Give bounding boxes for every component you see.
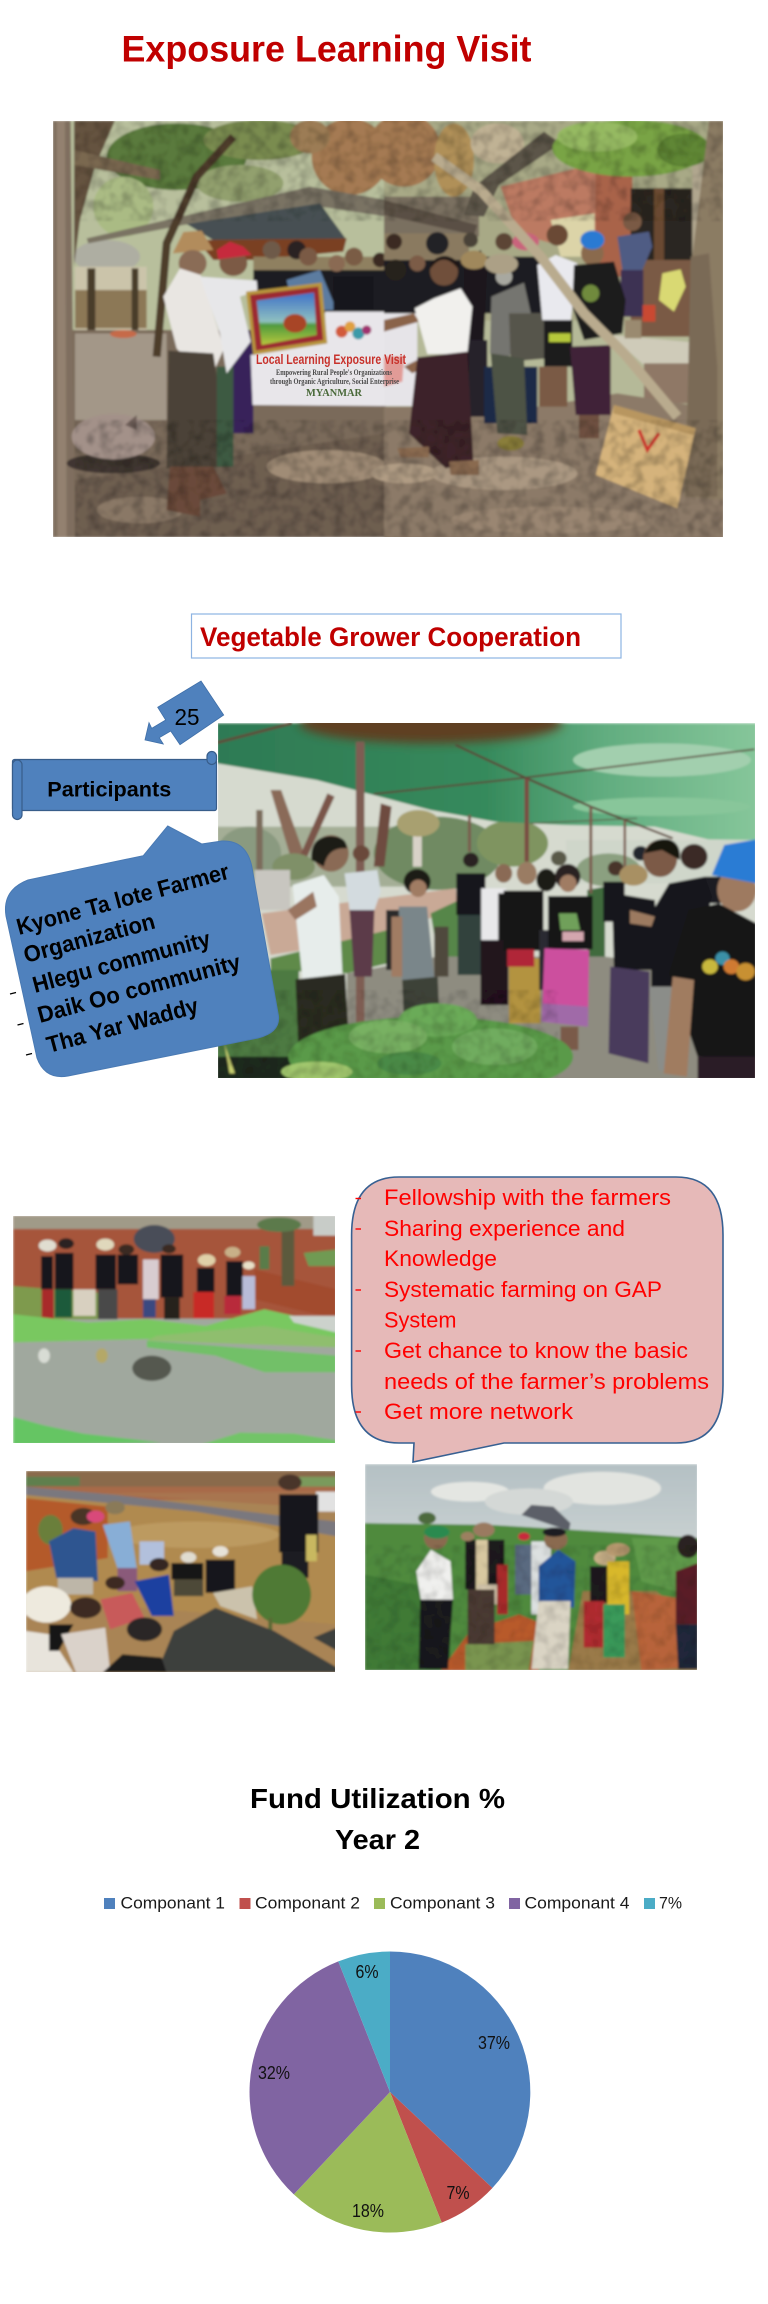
concrete floor: [345, 955, 700, 1078]
people on bank: [41, 1253, 243, 1298]
pie chart: fund utilization: 7%: [446, 2183, 470, 2203]
speech bubble: benefits: needs of the farmer’s problems: [384, 1369, 709, 1394]
scroll banner: Participants: Participants: [47, 779, 171, 802]
man behind pole: [353, 845, 370, 861]
woman in pink skirt: [536, 869, 556, 891]
man with shoulder bag: [473, 1523, 495, 1537]
beams and poles: [217, 723, 292, 743]
foliage: [552, 120, 709, 177]
distant fields: [26, 1471, 337, 1491]
pie chart: fund utilization: 32%: [258, 2063, 290, 2083]
dirt road: [262, 888, 457, 955]
woman in striped skirt: [619, 864, 648, 886]
banner: [251, 312, 387, 406]
seedling trays: [157, 1608, 337, 1672]
speech bubble: benefits: System: [384, 1308, 456, 1332]
chart title: [250, 1783, 505, 1855]
distant trees: [218, 826, 406, 888]
shade net: [217, 723, 756, 840]
leaf litter texture: [75, 420, 723, 537]
callout: communities: Tha Yar Waddy: [44, 992, 201, 1058]
ground: [384, 407, 724, 540]
chart legend: Componant 2: [255, 1894, 360, 1912]
centre man: [384, 313, 417, 406]
callout: communities: Daik Oo community: [35, 949, 243, 1028]
cardboard box: [596, 405, 696, 508]
scroll banner: Participants: [12, 752, 216, 820]
woman in white jacket: [495, 864, 512, 883]
speech bubble: benefits: Knowledge: [384, 1246, 497, 1271]
pie chart: fund utilization: 37%: [478, 2033, 510, 2053]
speech bubble: benefits: Fellowship with the farmers: [384, 1185, 671, 1210]
chart legend: 7%: [659, 1894, 682, 1912]
man with red cap: [232, 330, 253, 433]
man in blue cap: [717, 868, 756, 912]
chart legend: Componant 3: [390, 1894, 495, 1912]
speech bubble: benefits: Systematic farming on GAP: [384, 1277, 662, 1302]
branch: [157, 137, 233, 357]
back row of people: [253, 270, 387, 313]
title: Exposure Learning Visit: [122, 27, 532, 69]
boy in white shirt: [547, 224, 568, 246]
pie chart: fund utilization: 6%: [356, 1962, 378, 1982]
pig: [67, 453, 160, 473]
green pond liner: [13, 1309, 336, 1346]
sapling: [252, 1565, 311, 1624]
speech bubble: benefits: Sharing experience and: [384, 1216, 625, 1241]
speech bubble: benefits: Get more network: [384, 1399, 574, 1424]
man checking phone: [643, 840, 677, 877]
right trunk: [691, 121, 723, 408]
man pointing: [313, 835, 349, 872]
embankment: [26, 1495, 337, 1624]
woman in patterned top: [404, 869, 431, 894]
photo: field with people under umbrella: [365, 1464, 699, 1671]
chart title: Fund Utilization %: [250, 1783, 505, 1814]
callout: communities: Hlegu community: [30, 925, 213, 998]
photo: group examining seedling trays by road: [22, 1471, 337, 1673]
orange soil path: [441, 1614, 544, 1671]
photo: shade-net nursery with group: [218, 723, 755, 1078]
man in blue shirt: [544, 1530, 568, 1550]
brick house: [500, 168, 597, 243]
callout arrow: 25: 25: [174, 704, 200, 730]
hedges: [271, 930, 388, 973]
banner text: Local Learning Exposure Visit: [256, 351, 406, 367]
man at window: [623, 212, 642, 231]
green field: [365, 1523, 698, 1671]
crouching group: [71, 1508, 96, 1525]
left trunk pair: [74, 121, 115, 267]
man in black t-shirt: [463, 853, 479, 867]
pie chart: fund utilization: 18%: [352, 2201, 384, 2221]
small shed: [74, 240, 140, 267]
people at back right: [551, 851, 567, 866]
concrete and low wall: [614, 334, 690, 365]
fields: [13, 1216, 336, 1319]
lower liner: [13, 1417, 162, 1445]
banner text: [256, 354, 406, 396]
photo: group beside pond: [13, 1216, 336, 1445]
heading box: Vegetable Grower Cooperation: [192, 614, 621, 658]
crowd: [384, 257, 542, 313]
chart legend: Componant 1: [120, 1894, 225, 1912]
photo: group with banner under trees: [53, 113, 724, 540]
man in white shirt: [424, 1527, 448, 1549]
foreground people: [22, 1586, 71, 1623]
trees on horizon: [418, 1512, 436, 1524]
right half scenery: [384, 121, 724, 321]
woman with red bag: [517, 862, 537, 885]
callout: communities: Kyone Ta lote Farmer: [14, 858, 232, 940]
road: [26, 1487, 337, 1536]
callout: communities: [5, 826, 279, 1077]
heading box: Vegetable Grower Cooperation: Vegetable Grower Cooperation: [200, 622, 581, 652]
banner text: through Organic Agriculture, Social Enterprise: [270, 377, 399, 386]
branch across group: [434, 157, 677, 417]
umbrella: [522, 1505, 571, 1531]
hut roof and tarp: [87, 187, 387, 243]
reflection: [132, 1356, 171, 1381]
left half scenery: [116, 121, 380, 122]
chart legend: [104, 1894, 682, 1912]
callout: communities: Organization: [21, 908, 158, 968]
speech bubble: benefits: Get chance to know the basic: [384, 1338, 688, 1363]
left lower plants: [218, 968, 300, 1059]
speech bubble: benefits: [352, 1177, 723, 1462]
standing man: [278, 1474, 302, 1490]
seedlings: [288, 1017, 573, 1097]
callout arrow: 25: [145, 681, 224, 745]
man with blue cap: [581, 241, 604, 265]
banner text: Empowering Rural People's Organizations: [276, 368, 392, 377]
women on right: [594, 1551, 616, 1565]
yellow cloth and bucket: [659, 269, 686, 312]
banner logo: [336, 326, 348, 338]
man with hat: [173, 231, 213, 253]
chart title: Year 2: [335, 1824, 420, 1855]
others behind: [461, 1532, 475, 1541]
banner text: MYANMAR: [306, 387, 363, 399]
painting: [246, 283, 327, 355]
woman with sun hat and bag: [496, 268, 512, 285]
pie chart: fund utilization: [250, 1952, 530, 2232]
chart legend: Componant 4: [524, 1894, 630, 1912]
